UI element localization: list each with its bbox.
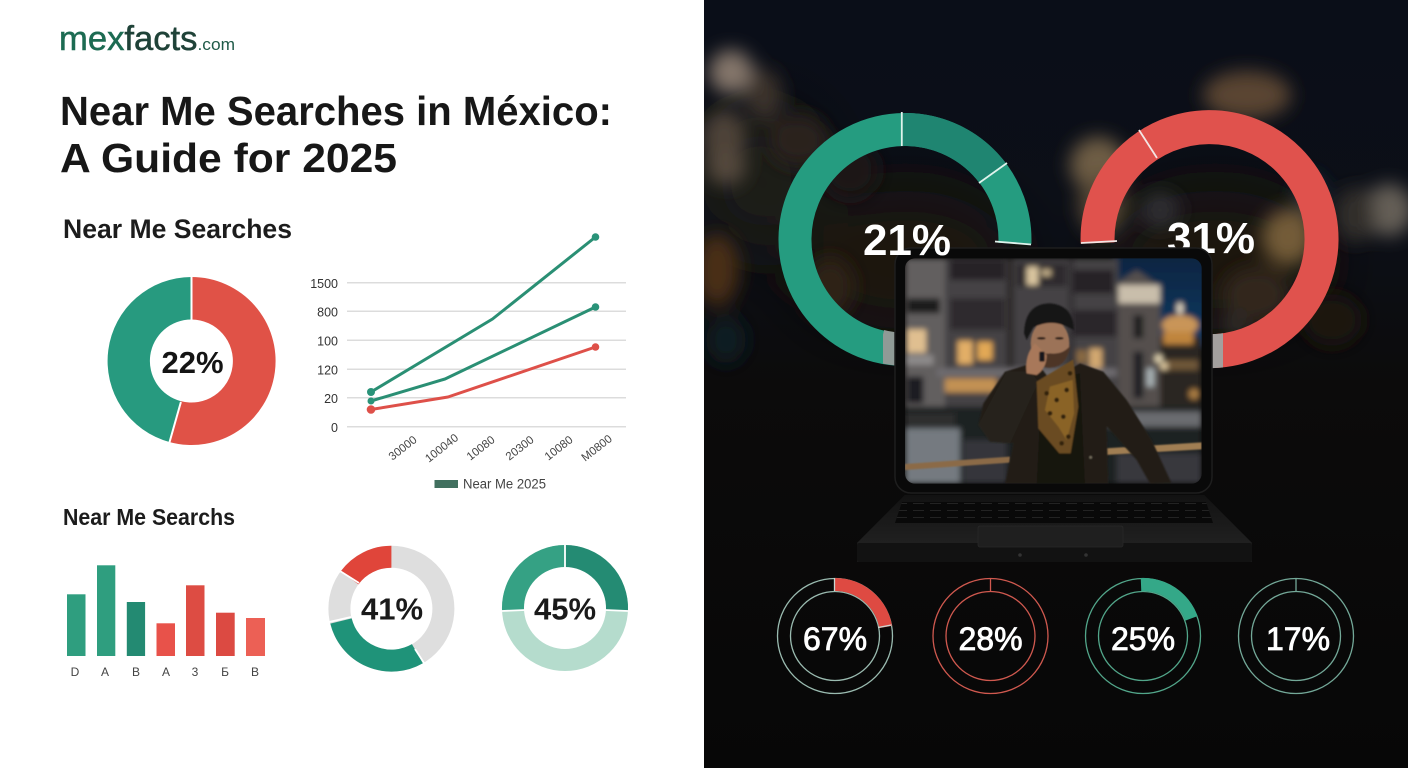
chart: large red ring bbox=[1081, 127, 1322, 351]
chart: bar chart: A bbox=[162, 665, 170, 679]
title: Near Me Searches in México: bbox=[60, 88, 612, 134]
small ring: 17% bbox=[1238, 578, 1354, 694]
chart: 22% donut bbox=[108, 276, 276, 445]
chart: 22% donut: 22% bbox=[161, 345, 224, 380]
small ring: 17%: 17% bbox=[1266, 621, 1330, 657]
chart: line chart: M0800 bbox=[580, 433, 615, 464]
chart: line chart: 120 bbox=[317, 364, 338, 378]
laptop base bbox=[857, 495, 1252, 562]
chart: bar chart: Б bbox=[221, 665, 229, 679]
chart: bar chart: B bbox=[251, 665, 259, 679]
chart: large green ring bbox=[795, 112, 1031, 350]
chart: bar chart bbox=[67, 565, 265, 679]
small ring: 67%: 67% bbox=[803, 621, 867, 657]
small ring: 28% bbox=[933, 578, 1048, 694]
panel: right dark background bbox=[704, 0, 1408, 768]
panel: left white background bbox=[0, 0, 704, 768]
photo railing bbox=[905, 442, 1202, 470]
photo: man on phone at night bbox=[905, 253, 1207, 484]
chart: line chart bbox=[310, 233, 626, 491]
chart: 41% donut: 41% bbox=[361, 592, 423, 626]
label: 21%: 21% bbox=[863, 216, 951, 265]
chart: line chart: Near Me 2025 bbox=[463, 476, 546, 492]
small ring: 67% bbox=[778, 578, 892, 694]
small ring: 25% bbox=[1086, 578, 1200, 694]
chart: 41% donut bbox=[329, 557, 443, 663]
photo man bbox=[978, 303, 1172, 484]
logo: mexfacts.com: mexfacts.com bbox=[59, 20, 235, 58]
chart: 45% donut bbox=[502, 545, 628, 660]
chart: 45% donut: 45% bbox=[534, 592, 596, 626]
title bbox=[60, 88, 612, 181]
chart: bar chart: A bbox=[101, 665, 109, 679]
chart: bar chart: B bbox=[132, 665, 140, 679]
title: A Guide for 2025 bbox=[60, 135, 397, 181]
heading: Near Me Searchs: Near Me Searchs bbox=[63, 504, 235, 530]
chart: line chart: 20 bbox=[324, 392, 338, 406]
chart: line chart: 100 bbox=[317, 334, 338, 348]
heading: Near Me Searches: Near Me Searches bbox=[63, 214, 292, 244]
small ring: 28%: 28% bbox=[958, 621, 1023, 657]
chart: line chart: 0 bbox=[331, 421, 338, 435]
chart: line chart: 100040 bbox=[423, 432, 461, 465]
photo background bbox=[905, 253, 1207, 484]
chart: bar chart: D bbox=[71, 665, 80, 679]
label: 31%: 31% bbox=[1167, 214, 1255, 263]
chart: line chart: 20300 bbox=[504, 434, 536, 463]
chart: line chart: 10080 bbox=[543, 434, 575, 463]
illustration: laptop bbox=[857, 248, 1252, 562]
chart: line chart: 800 bbox=[317, 306, 338, 320]
chart: line chart: 10080 bbox=[465, 434, 497, 463]
chart: bar chart: 3 bbox=[192, 665, 199, 679]
laptop bezel bbox=[895, 248, 1212, 493]
small ring: 25%: 25% bbox=[1111, 621, 1175, 657]
chart: line chart: 30000 bbox=[387, 434, 419, 463]
chart: line chart: 1500 bbox=[310, 277, 338, 291]
background: blurred city lights bbox=[695, 50, 1408, 364]
